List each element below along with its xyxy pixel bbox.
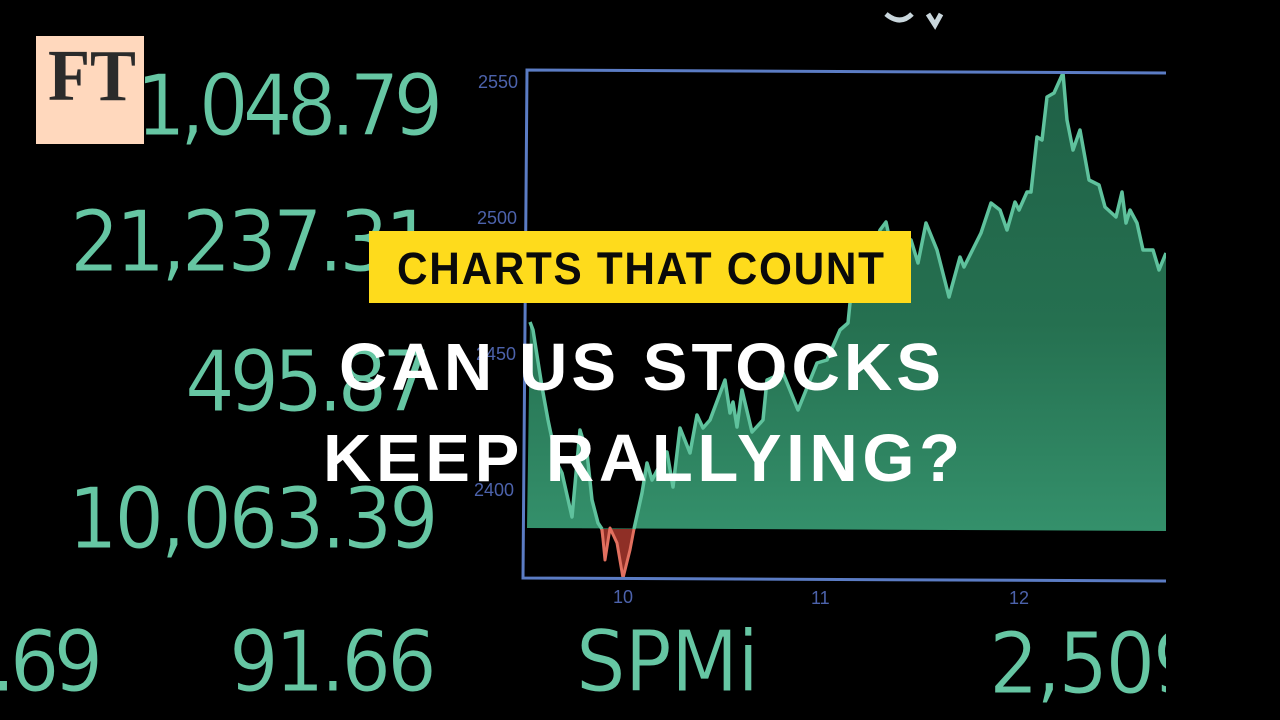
headline [323, 330, 960, 496]
y label 2500: 2500 [477, 208, 517, 228]
ticker value bottom middle: 91.66 [229, 613, 437, 712]
red area below the baseline [600, 529, 632, 570]
y label 2400: 2400 [474, 480, 514, 500]
y label 2550: 2550 [478, 72, 518, 92]
FT logo: FT [48, 35, 136, 116]
green price line [530, 322, 602, 529]
series banner [369, 231, 911, 303]
ticker value row 3: 495.87 [185, 333, 432, 432]
x label 11: 11 [811, 588, 830, 608]
series banner: CHARTS THAT COUNT [397, 244, 884, 294]
green area above the baseline [527, 73, 1166, 531]
chart frame [523, 70, 1166, 581]
y label 2450: 2450 [476, 344, 516, 364]
ticker value bottom right: 2,509 [989, 615, 1202, 714]
red price line [602, 528, 634, 578]
ticker symbol SPMi: SPMi [576, 613, 759, 712]
green price line continued [634, 73, 1166, 529]
x label 10: 10 [613, 587, 633, 607]
ticker value row 1: 1,048.79 [136, 57, 443, 156]
x axis labels [614, 590, 1028, 604]
headline line 1: CAN US STOCKS [339, 330, 941, 405]
ticker value row 2: 21,237.31 [70, 193, 434, 292]
y axis labels [474, 72, 518, 500]
stock index area chart [523, 70, 1166, 581]
partial glyphs at top edge [886, 14, 941, 25]
headline line 2: KEEP RALLYING? [323, 421, 960, 496]
ticker value row 4: 10,063.39 [68, 470, 439, 569]
x label 12: 12 [1009, 588, 1029, 608]
FT logo [36, 35, 144, 144]
